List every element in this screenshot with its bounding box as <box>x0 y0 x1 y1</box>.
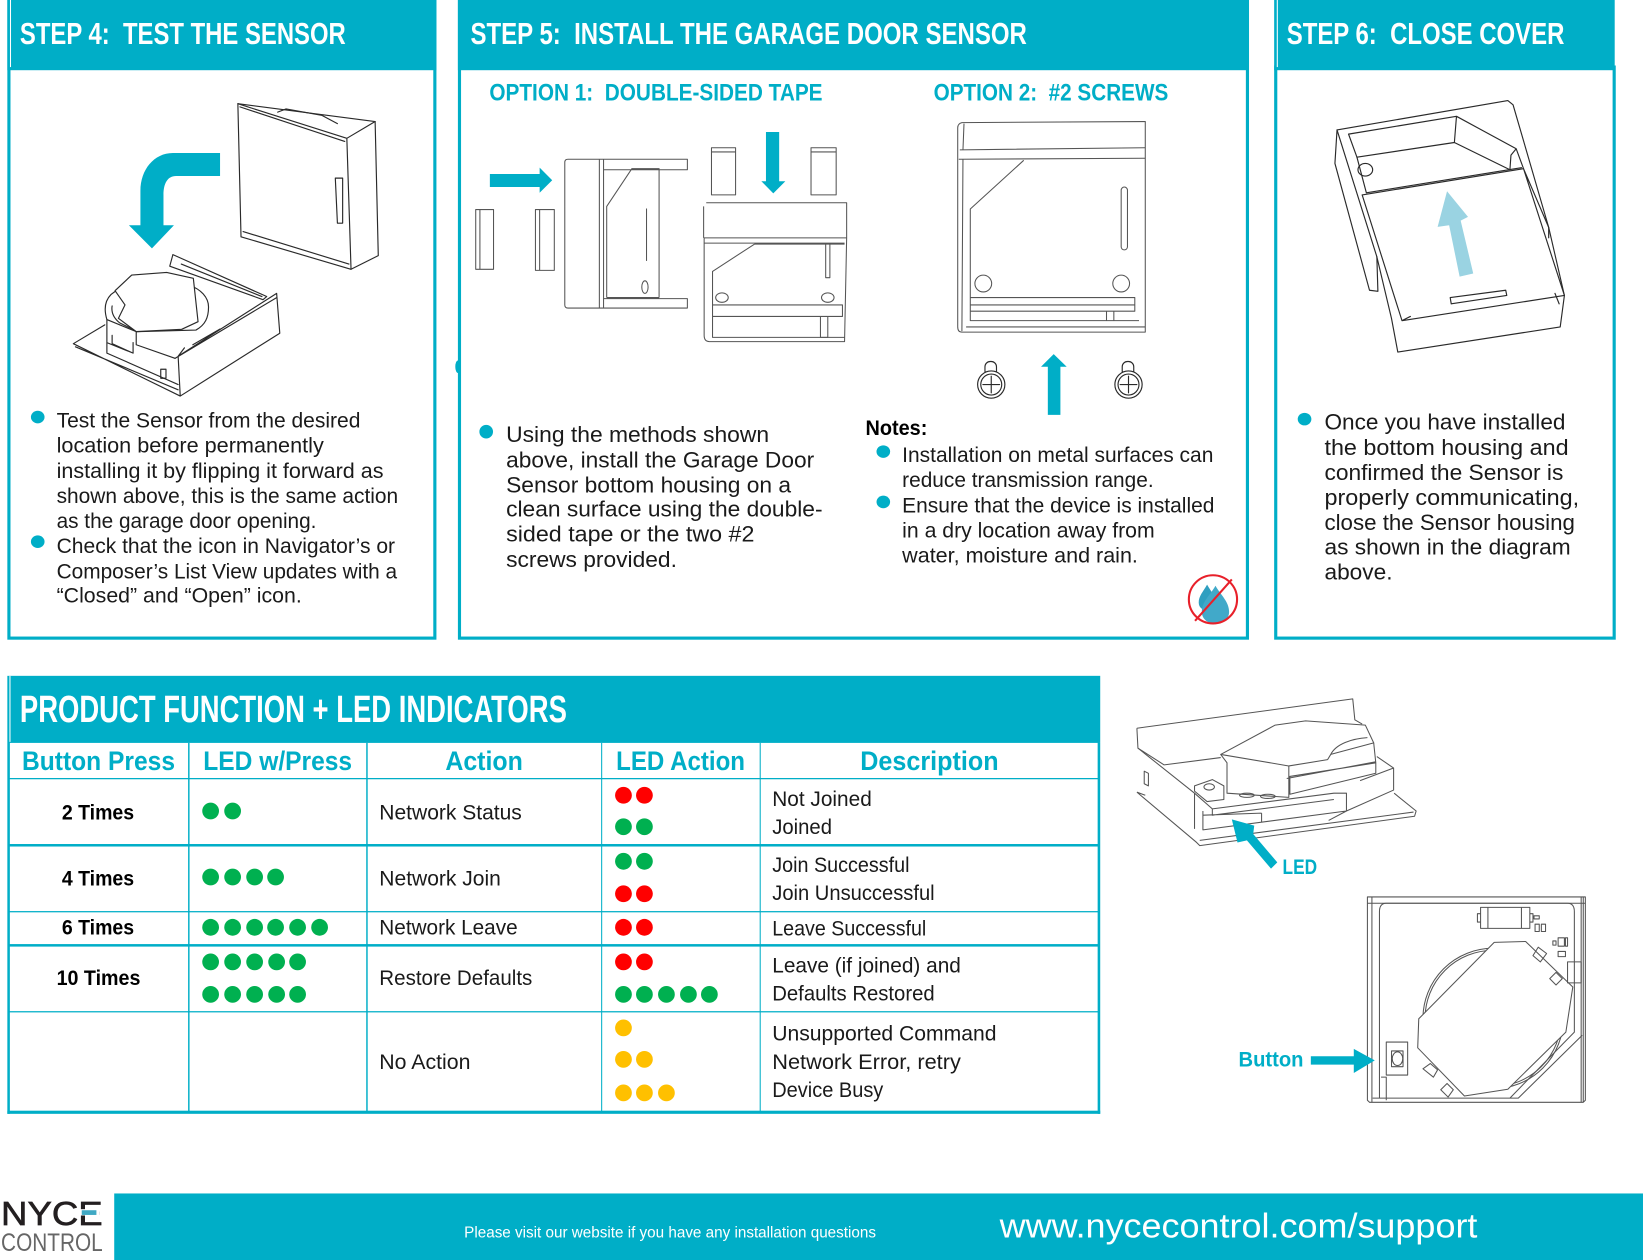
column: description: Not Joined <box>772 788 872 811</box>
illustration: tape pieces <box>476 148 836 270</box>
column: description: Leave Successful <box>772 918 926 941</box>
bullet list: test instructions: location before permanently <box>57 435 324 458</box>
heading: option 2: OPTION 2: #2 SCREWS <box>934 80 1168 107</box>
bullet list: close instructions: close the Sensor housing <box>1324 510 1575 535</box>
illustration: sensor front view <box>704 203 847 342</box>
bullet list: close instructions: the bottom housing and <box>1324 435 1569 460</box>
bullet list: test instructions: Test the Sensor from the desired <box>57 410 360 433</box>
arrow: LED pointer <box>1232 819 1277 869</box>
text: install instructions: sided tape or the two #2 <box>506 522 754 547</box>
bullet list: test instructions: Composer’s List View updates with a <box>57 560 397 583</box>
footer note: Please visit our website if you have any installation questions <box>464 1224 876 1241</box>
illustration: cover and base <box>73 104 378 396</box>
column: description: Joined <box>772 816 832 839</box>
column: description: Device Busy <box>772 1079 884 1102</box>
bullet list: close instructions: confirmed the Sensor is <box>1324 460 1563 485</box>
icon: screw right <box>1115 361 1142 398</box>
table header band <box>7 676 1100 743</box>
footer band <box>114 1193 1643 1260</box>
arrow: close direction <box>1438 191 1473 277</box>
bullet list: close instructions: as shown in the diagram <box>1324 534 1571 559</box>
bullet list: test instructions: shown above, this is the same action <box>57 485 398 508</box>
column headings: Button Press <box>22 745 175 776</box>
column headings: Description <box>860 745 999 776</box>
logo: NYCE Control: NYCE <box>1 1196 103 1233</box>
bullet list: close instructions: Once you have installed <box>1324 410 1565 435</box>
column headings <box>22 745 999 776</box>
column: button press: 6 Times <box>62 917 134 940</box>
column: description <box>772 788 996 1102</box>
icon: no water <box>1189 575 1237 624</box>
bullet list: close instructions: properly communicating, <box>1324 485 1579 510</box>
column: button press <box>57 801 140 990</box>
illustration: sensor internal view with button <box>1367 897 1585 1102</box>
label: Button: Button <box>1239 1049 1303 1072</box>
arrow: right <box>490 168 552 193</box>
arrow: up <box>1041 354 1067 415</box>
text: install instructions <box>479 422 823 572</box>
illustration: sensor with LED location <box>1137 699 1416 846</box>
arrow: curved flip arrow <box>129 153 220 248</box>
column: action: No Action <box>379 1051 470 1074</box>
text: install instructions: Using the methods shown <box>506 422 769 447</box>
bullet list: test instructions: “Closed” and “Open” icon. <box>57 584 302 607</box>
bullet list: close instructions <box>1298 410 1579 584</box>
text: notes: reduce transmission range. <box>902 469 1154 492</box>
column: description: Network Error, retry <box>772 1051 961 1074</box>
label: LED: LED <box>1283 856 1317 879</box>
column: action <box>379 801 532 1074</box>
header: step 5 <box>458 0 1249 70</box>
panel: step 6 close cover <box>1274 0 1615 638</box>
column headings: Action <box>445 745 523 776</box>
text: notes: water, moisture and rain. <box>901 545 1138 568</box>
header: step 5: STEP 5: INSTALL THE GARAGE DOOR SENSOR <box>470 17 1027 51</box>
bullet list: test instructions: as the garage door opening. <box>57 510 316 533</box>
text: install instructions: above, install the Garage Door <box>506 447 815 472</box>
icon: screw left <box>978 361 1005 398</box>
column: action: Network Leave <box>379 917 518 940</box>
illustration: sensor side view <box>565 159 687 308</box>
column: description: Defaults Restored <box>772 983 935 1006</box>
column: button press: 10 Times <box>57 967 140 990</box>
panel: step 4 test the sensor <box>7 0 436 638</box>
column: description: Join Successful <box>772 854 910 877</box>
column: button press: 4 Times <box>62 867 134 890</box>
column: LED action <box>615 787 718 1101</box>
bullet list: test instructions: Check that the icon in Navigator’s or <box>57 535 395 558</box>
arrow: button pointer <box>1311 1049 1375 1073</box>
text: notes <box>866 417 1214 568</box>
column: button press: 2 Times <box>62 801 134 824</box>
bullet list: close instructions: above. <box>1324 559 1393 584</box>
text: install instructions: clean surface using the double- <box>506 497 823 522</box>
header: step 4: STEP 4: TEST THE SENSOR <box>20 17 346 51</box>
logo: NYCE Control: CONTROL <box>1 1229 103 1257</box>
text: notes: in a dry location away from <box>902 520 1155 543</box>
column: LED with press <box>202 803 328 1003</box>
table grid <box>7 743 1100 1114</box>
footer url: www.nycecontrol.com/support <box>999 1207 1478 1245</box>
illustration: closing cover <box>1335 101 1564 352</box>
logo: NYCE Control <box>1 1196 103 1257</box>
table header band: PRODUCT FUNCTION + LED INDICATORS <box>20 688 567 730</box>
text: install instructions: Sensor bottom housing on a <box>506 472 792 497</box>
decorative dot remnant <box>455 360 461 373</box>
column: description: Leave (if joined) and <box>772 954 961 977</box>
column: description: Unsupported Command <box>772 1022 996 1045</box>
text: notes: Notes: <box>866 417 927 440</box>
bullet list: test instructions <box>31 410 398 607</box>
panel: step 5 install the sensor <box>455 0 1249 638</box>
text: notes: Ensure that the device is installed <box>902 494 1214 517</box>
bullet list: test instructions: installing it by flipping it forward as <box>57 460 384 483</box>
header: step 4 <box>7 0 436 70</box>
illustration: sensor with screw holes <box>958 122 1145 332</box>
column: action: Network Join <box>379 867 501 890</box>
text: install instructions: screws provided. <box>506 547 677 572</box>
table: product function and LED indicators <box>7 676 1100 1114</box>
arrow: down <box>761 132 785 193</box>
heading: option 1: OPTION 1: DOUBLE-SIDED TAPE <box>489 80 823 107</box>
column: action: Network Status <box>379 801 522 824</box>
text: notes: Installation on metal surfaces can <box>902 444 1213 467</box>
column: action: Restore Defaults <box>379 967 532 990</box>
column headings: LED Action <box>616 745 745 776</box>
column: description: Join Unsuccessful <box>772 882 935 905</box>
column headings: LED w/Press <box>203 745 352 776</box>
header: step 6 <box>1274 0 1615 70</box>
header: step 6: STEP 6: CLOSE COVER <box>1287 17 1564 51</box>
